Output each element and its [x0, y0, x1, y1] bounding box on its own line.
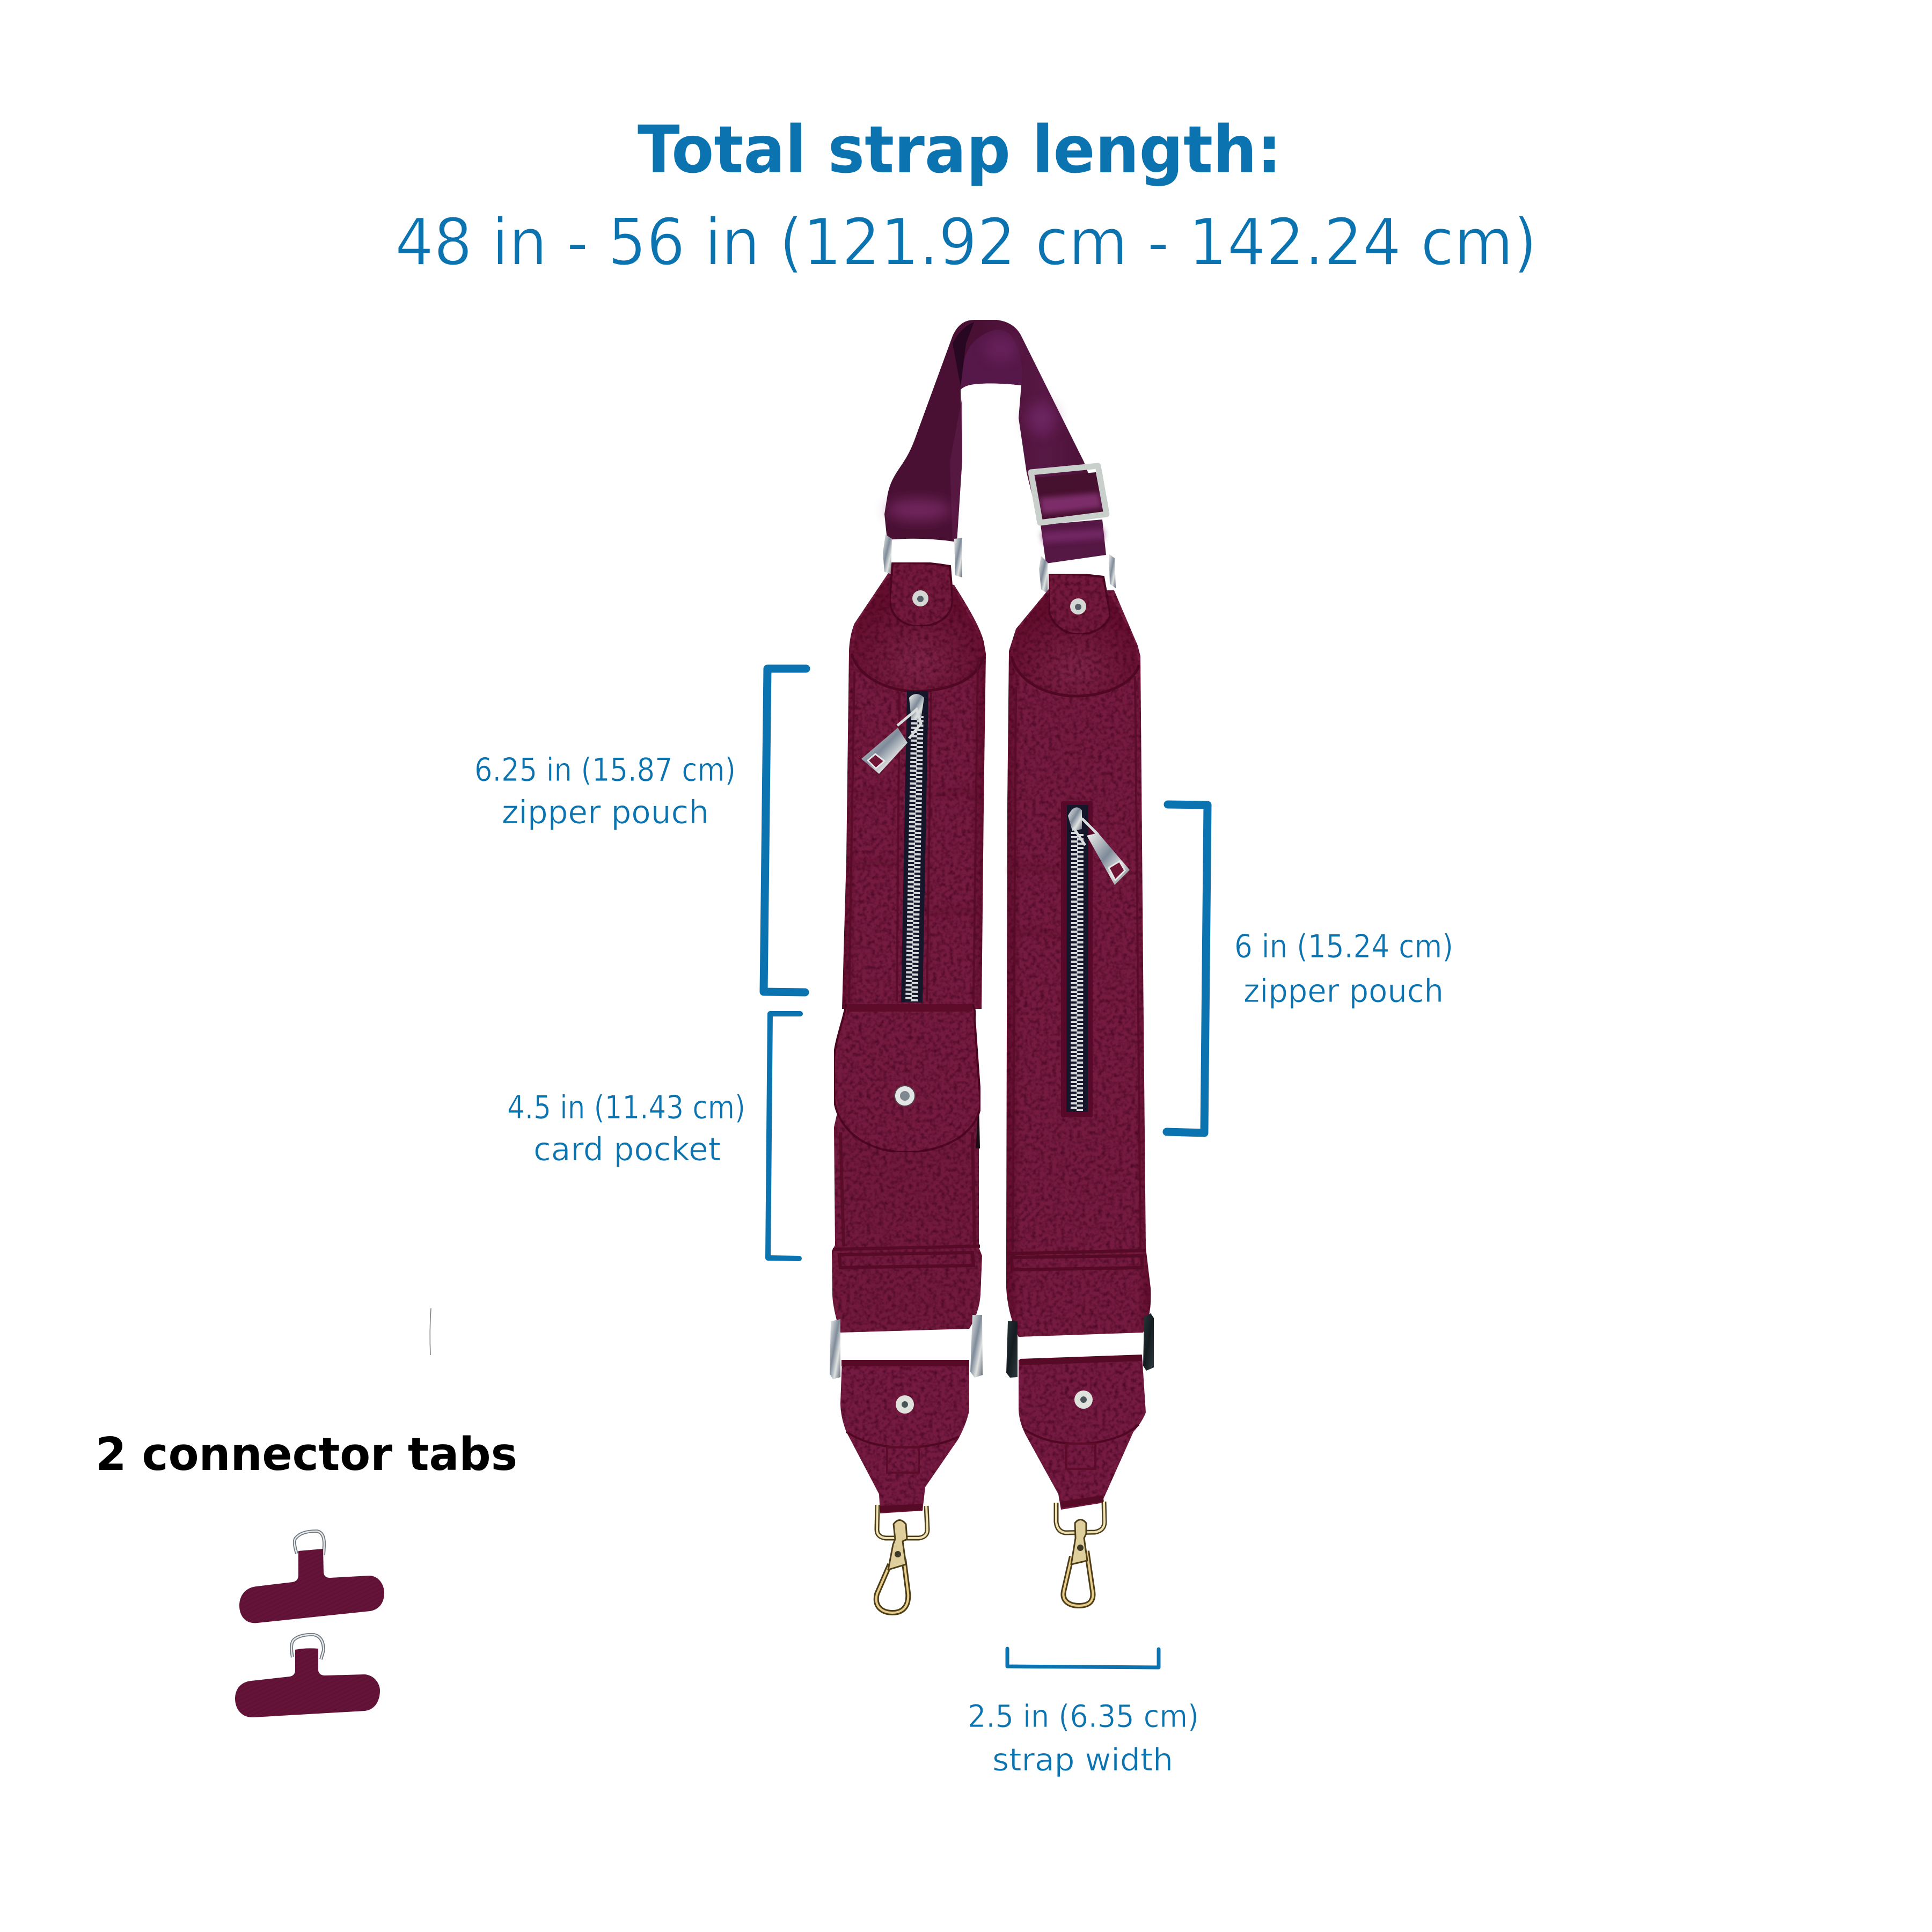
top flap seam [1012, 656, 1139, 696]
right slider hardware [1006, 1313, 1154, 1378]
band stitching [1006, 1250, 1146, 1270]
stray mark [430, 1308, 431, 1355]
bracket: left zipper pouch [764, 669, 806, 992]
label: right zipper pouch: zipper pouch [1243, 972, 1444, 1010]
heading: connector tabs: 2 connector tabs [96, 1428, 517, 1481]
right lower tab [1019, 1355, 1146, 1510]
label: strap width: strap width [992, 1741, 1173, 1778]
slider buckle [1031, 466, 1107, 523]
webbing loop [884, 320, 1106, 564]
right top tab and snap [1049, 574, 1110, 634]
card pocket flap [834, 1004, 980, 1152]
label: right zipper pouch: 6 in (15.24 cm) [1234, 928, 1453, 965]
label: left zipper pouch: 6.25 in (15.87 cm) [474, 751, 736, 789]
top flap seam [852, 654, 983, 691]
left strap upper body [842, 573, 986, 1009]
label: right zipper pouch [1234, 928, 1453, 1010]
pocket band [833, 1246, 980, 1268]
card pocket snap [895, 1086, 915, 1106]
label: strap width [968, 1698, 1199, 1778]
label: card pocket [507, 1089, 745, 1168]
label: strap width: 2.5 in (6.35 cm) [968, 1698, 1199, 1735]
connector tab 1 [239, 1531, 384, 1623]
right snap hook [1056, 1502, 1104, 1606]
left zipper [861, 691, 924, 1002]
left strap lower body with card pocket [832, 1004, 982, 1333]
left slider hardware [830, 1315, 983, 1379]
connector tab 2 [235, 1635, 380, 1717]
bracket: card pocket [768, 1014, 800, 1258]
bracket: right zipper pouch [1167, 804, 1208, 1133]
product photo: strap [830, 320, 1154, 1613]
connector rings, top [883, 535, 1116, 594]
label: card pocket: 4.5 in (11.43 cm) [507, 1089, 745, 1126]
label: card pocket: card pocket [533, 1131, 721, 1168]
label: left zipper pouch: zipper pouch [502, 794, 709, 831]
left snap hook [876, 1505, 927, 1613]
right zipper [1061, 801, 1130, 1117]
left top tab and snap [890, 562, 953, 626]
left lower tab [840, 1361, 969, 1513]
subtitle: total length range: 48 in - 56 in (121.92 cm - 142.24 cm) [395, 206, 1537, 280]
title: Total strap length: [638, 112, 1282, 188]
bracket: strap width [1007, 1649, 1159, 1667]
right strap body [1006, 589, 1151, 1337]
label: left zipper pouch [474, 751, 736, 831]
